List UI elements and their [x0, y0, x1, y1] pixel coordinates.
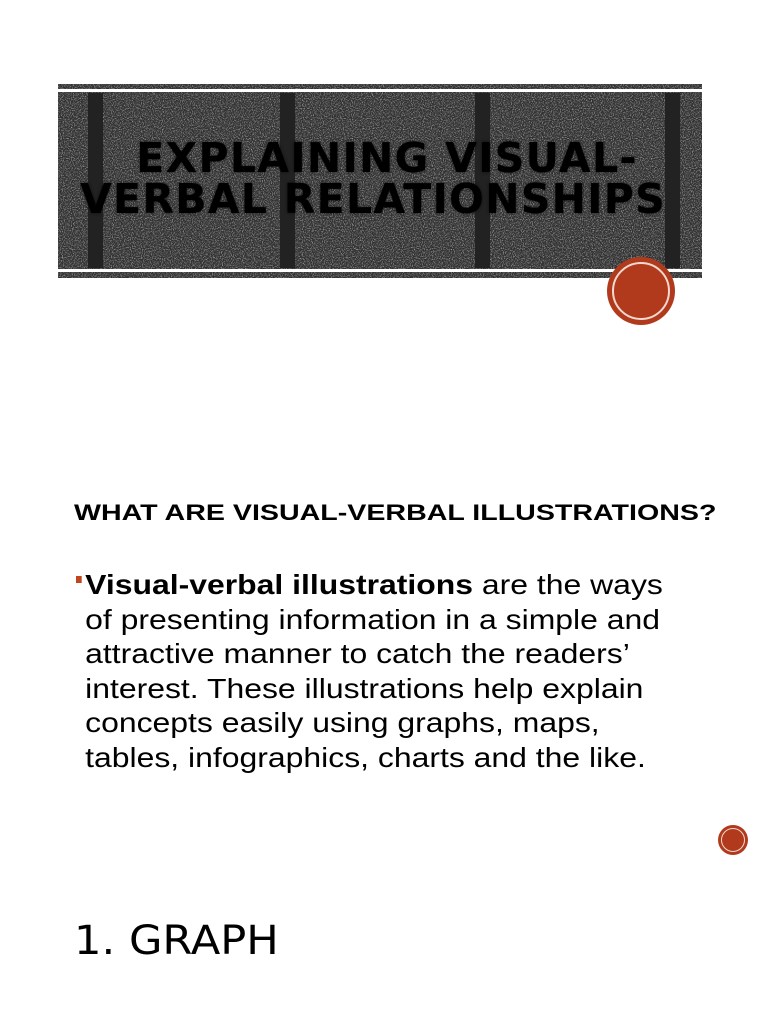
title text — [79, 134, 666, 223]
title banner — [58, 84, 702, 278]
title text: VERBAL RELATIONSHIPS — [80, 175, 666, 223]
bullet text block: of presenting information in a simple and — [85, 604, 660, 634]
decorative circle small — [718, 825, 748, 855]
decorative circle large — [607, 257, 675, 325]
bullet text block: attractive manner to catch the readers’ — [85, 638, 630, 669]
bullet text block: concepts easily using graphs, maps, — [85, 707, 600, 738]
heading: WHAT ARE VISUAL-VERBAL ILLUSTRATIONS? — [74, 500, 716, 525]
bullet text block: tables, infographics, charts and the like. — [85, 742, 646, 772]
bullet text block: Visual-verbal illustrations are the ways — [85, 569, 663, 600]
title text: EXPLAINING VISUAL- — [136, 134, 638, 182]
bullet marker — [76, 576, 82, 583]
bullet text block — [76, 569, 663, 773]
section heading: 1. GRAPH: 1. GRAPH — [74, 918, 279, 964]
bullet text block: interest. These illustrations help explain — [85, 672, 643, 704]
